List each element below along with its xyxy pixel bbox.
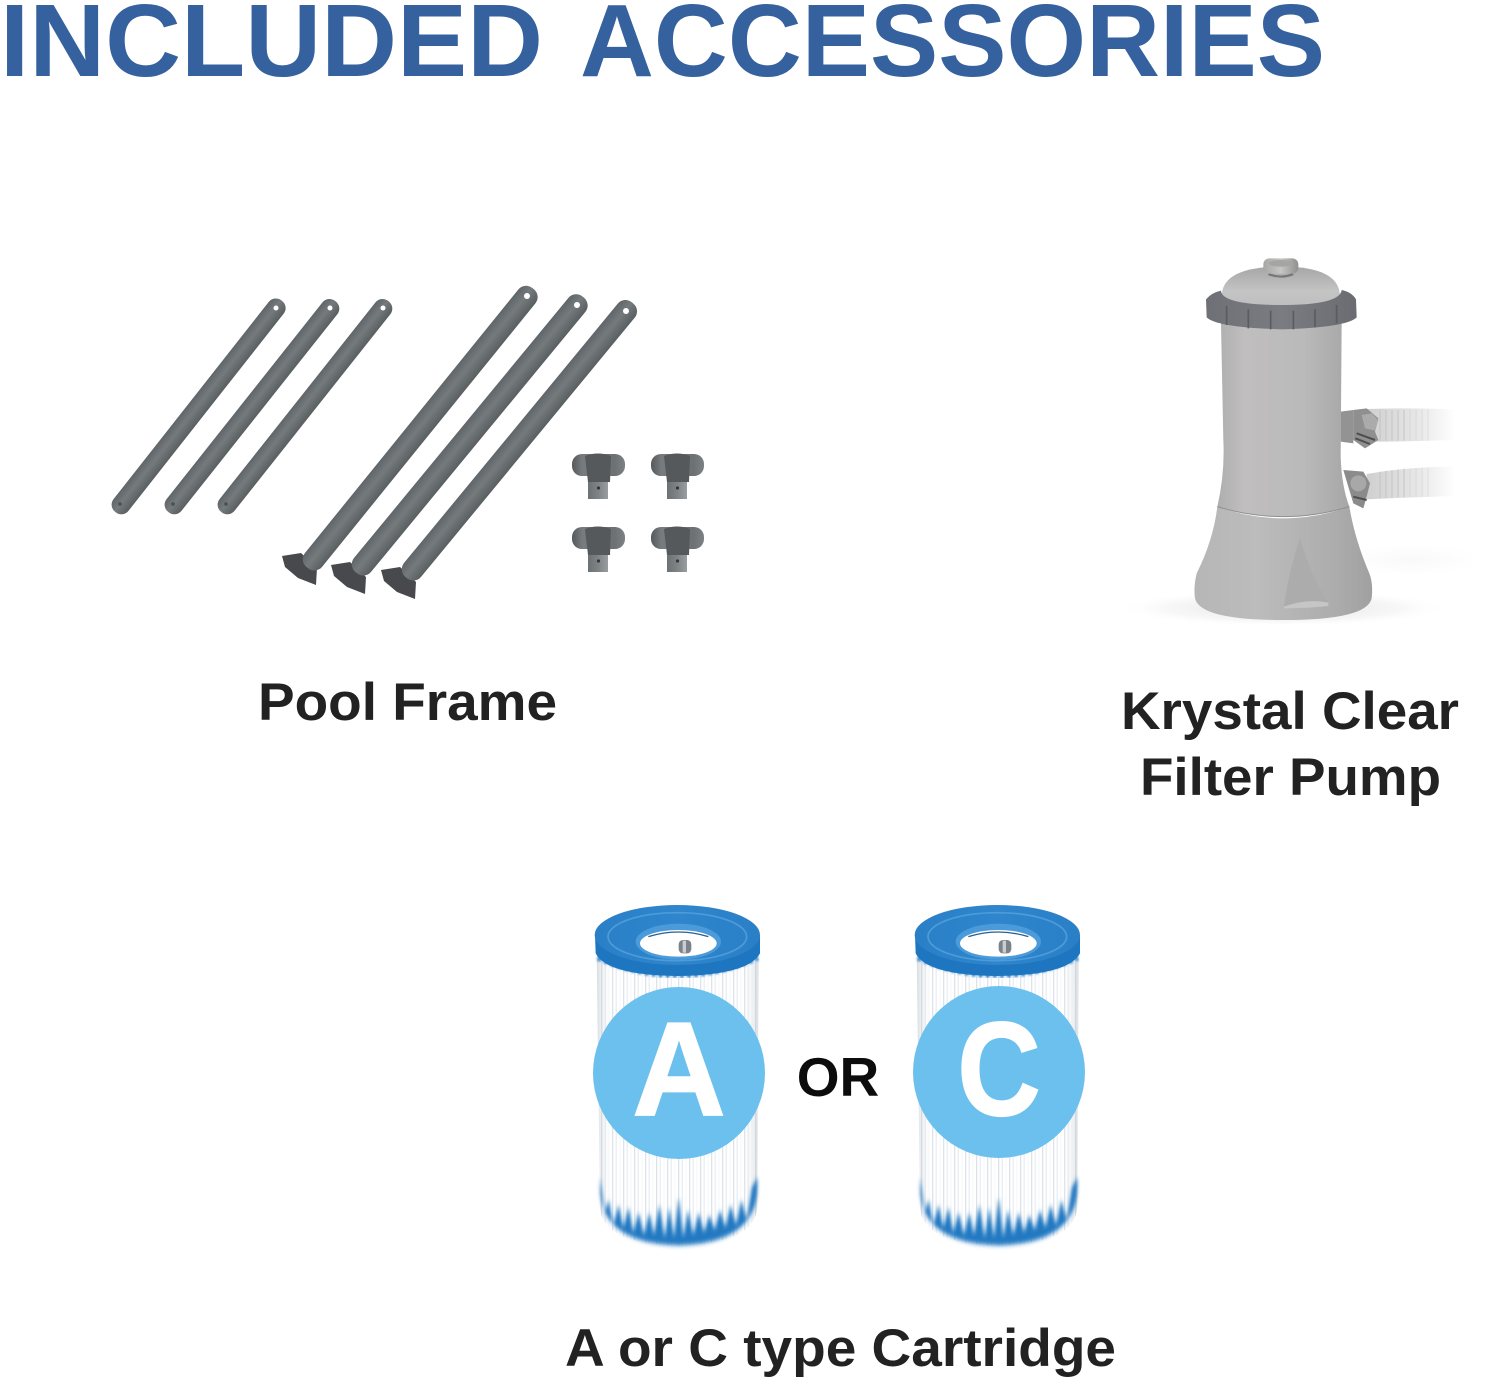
T connectors xyxy=(572,454,704,572)
icon: filter pump xyxy=(1117,258,1487,627)
hoses xyxy=(1367,408,1455,499)
panel: pool frame xyxy=(108,282,704,732)
cartridge A xyxy=(593,905,765,1245)
title xyxy=(0,0,1325,98)
label: cartridge: A or C type Cartridge xyxy=(565,1319,1116,1378)
badge C xyxy=(913,986,1085,1158)
badge C: C xyxy=(957,995,1041,1144)
badge A: A xyxy=(632,995,726,1144)
hose clamps xyxy=(1341,408,1378,508)
panel: cartridges xyxy=(565,905,1116,1378)
short frame rods xyxy=(108,295,396,518)
cartridge C xyxy=(913,905,1085,1245)
label: filter pump: Filter Pump xyxy=(1140,748,1441,807)
label: filter pump: Krystal Clear xyxy=(1121,682,1459,741)
text: or: OR xyxy=(797,1046,879,1108)
badge A xyxy=(593,987,765,1159)
panel: filter pump xyxy=(1117,258,1487,807)
label: pool frame: Pool Frame xyxy=(258,673,557,732)
label: filter pump xyxy=(1121,682,1459,807)
long frame rods with feet xyxy=(282,282,641,599)
